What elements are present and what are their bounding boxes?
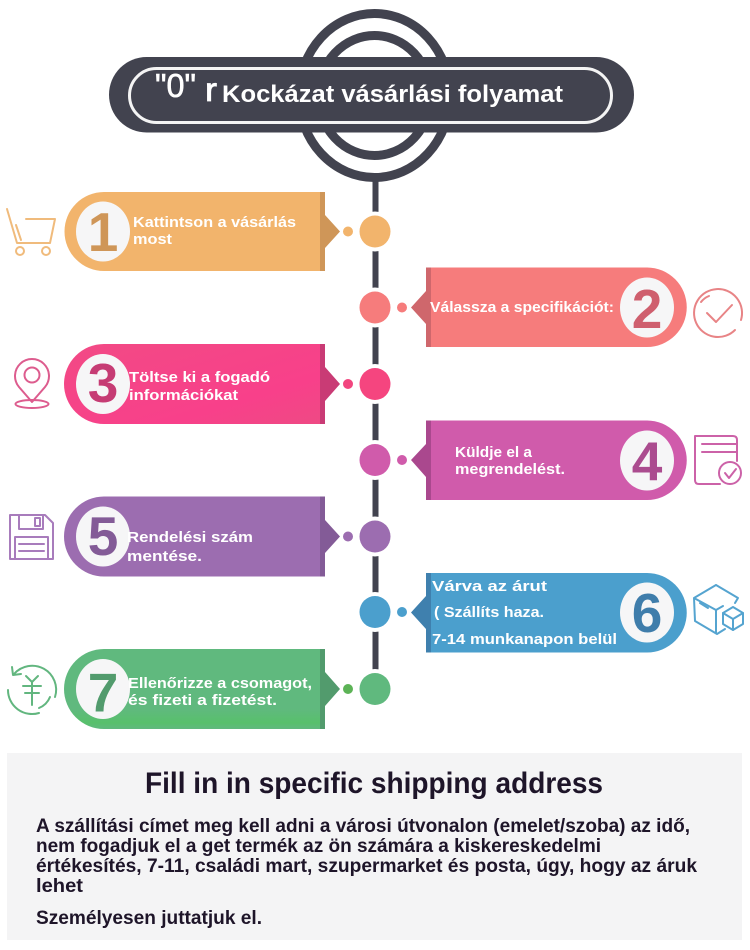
panel body text: Személyesen juttatjuk el.	[36, 907, 262, 929]
label: és fizeti a fizetést.	[128, 692, 277, 709]
label	[455, 444, 565, 478]
icon: refund circle	[8, 666, 56, 714]
label: információkat	[129, 387, 238, 404]
label: Kattintson a vásárlás	[133, 214, 296, 231]
label	[129, 369, 270, 404]
label: mentése.	[127, 548, 202, 565]
connector dots	[343, 212, 394, 252]
tab arrow	[411, 420, 431, 500]
number badge	[620, 582, 674, 642]
title text	[155, 67, 563, 108]
timeline spine	[372, 178, 378, 689]
panel body text	[36, 815, 697, 929]
title text: r	[205, 71, 217, 108]
label	[133, 214, 296, 248]
step 1	[7, 192, 394, 271]
pill	[64, 344, 325, 424]
label: Válassza a specifikációt:	[430, 299, 614, 316]
panel: shipping address note	[7, 753, 742, 940]
label: Várva az árut	[432, 578, 547, 595]
tab arrow	[320, 344, 340, 424]
panel body text: értékesítés, 7-11, családi mart, szupermarket és posta, úgy, hogy az áruk	[36, 855, 697, 877]
tab arrow	[320, 192, 340, 271]
title banner	[109, 14, 634, 178]
panel body text: nem fogadjuk el a get termék az ön számára a kiskereskedelmi	[36, 835, 601, 857]
number: 4	[632, 430, 663, 492]
number: 3	[88, 352, 118, 414]
step 7	[8, 649, 394, 729]
number: 2	[632, 278, 662, 340]
connector dots	[343, 364, 394, 404]
label: megrendelést.	[455, 461, 565, 478]
label: most	[133, 231, 172, 248]
label: 7-14 munkanapon belül	[432, 631, 617, 648]
step 4	[356, 420, 741, 500]
icon: floppy disk	[10, 515, 53, 559]
connector dots	[343, 669, 394, 709]
concentric rings	[299, 14, 450, 178]
panel background	[7, 753, 742, 940]
connector dots	[356, 440, 407, 480]
label	[127, 529, 253, 565]
title text: Kockázat vásárlási folyamat	[222, 81, 563, 108]
label: Töltse ki a fogadó	[129, 369, 270, 386]
panel body text: A szállítási címet meg kell adni a városi útvonalon (emelet/szoba) az idő,	[36, 815, 690, 837]
label: ( Szállíts haza.	[434, 604, 544, 621]
icon: shopping cart	[7, 209, 55, 255]
number badge	[620, 278, 674, 338]
step 5	[10, 496, 394, 576]
pill	[426, 268, 687, 347]
connector dots	[343, 516, 394, 556]
pill	[64, 649, 325, 729]
icon: location pin	[15, 359, 49, 408]
label	[128, 675, 312, 709]
connector dots	[356, 288, 407, 328]
number badge	[76, 506, 130, 566]
pill	[64, 496, 325, 576]
step 3	[15, 344, 394, 424]
step 6	[356, 573, 743, 652]
number badge	[76, 202, 130, 262]
number badge	[76, 659, 130, 719]
pill	[426, 420, 687, 500]
panel heading: Fill in in specific shipping address	[145, 767, 603, 800]
tab arrow	[411, 573, 431, 652]
title text: "0"	[155, 67, 196, 104]
label: Ellenőrizze a csomagot,	[128, 675, 312, 692]
icon: check circle	[694, 289, 742, 337]
number: 7	[88, 662, 118, 724]
number: 1	[88, 201, 118, 263]
number: 5	[88, 505, 118, 567]
pill	[64, 192, 325, 271]
icon: boxes	[694, 585, 743, 634]
label: Küldje el a	[455, 444, 533, 461]
tab arrow	[320, 496, 340, 576]
label: Rendelési szám	[127, 529, 253, 546]
panel body text: lehet	[36, 875, 84, 897]
banner bar	[109, 57, 634, 132]
number badge	[620, 430, 674, 490]
tab arrow	[320, 649, 340, 729]
pill	[426, 573, 687, 652]
step 2	[356, 268, 742, 347]
banner inner outline	[130, 68, 612, 122]
label	[432, 578, 617, 648]
number: 6	[632, 582, 662, 644]
tab arrow	[411, 268, 431, 347]
number badge	[76, 354, 130, 414]
icon: document with check	[695, 436, 741, 484]
connector dots	[356, 592, 407, 632]
